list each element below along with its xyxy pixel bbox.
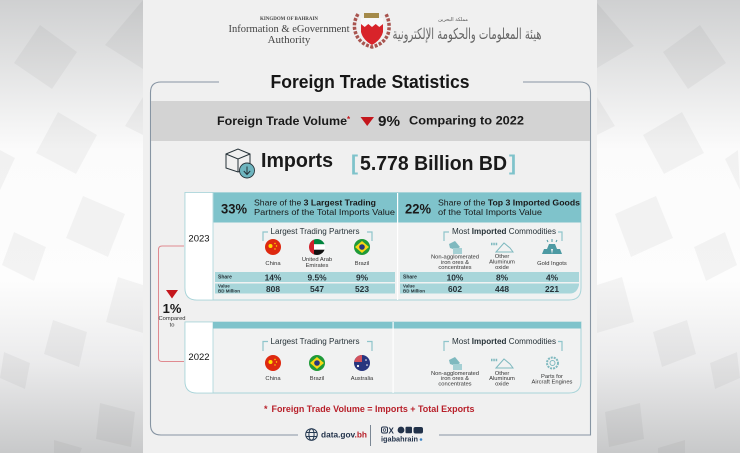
panel: largest trading partners 2022: Australia [351,376,374,382]
panel: most imported commodities 2023: Aluminum [489,260,515,266]
authority name in Arabic: هيئة المعلومات والحكومة الإلكترونية [392,25,542,43]
header: trading partners share: 33% [221,202,247,216]
year cell: 2022 [188,352,210,363]
panel: most imported commodities 2023: Non-agglomerated [431,254,479,260]
panel: most imported commodities 2023: concentrates [438,265,472,271]
summary band: Comparing to 2022 [409,116,524,128]
panel: most imported commodities 2023: iron ores & [441,260,469,266]
summary band: * [347,115,351,124]
imports heading: [ [351,152,358,175]
header logo block [228,13,542,47]
panel: largest trading partners 2023: Emirates [306,263,329,269]
data rows: 14% [265,272,282,282]
footer [306,425,423,446]
data rows: 8% [496,272,509,282]
authority name in English: Information & eGovernment [228,23,350,35]
data rows: 4% [546,272,559,282]
header: imported goods share: Share of the Top 3 Imported Goods [438,198,580,208]
table: 2023 [185,192,581,300]
panel: most imported commodities 2022: concentrates [438,382,472,388]
header: imported goods share: 22% [405,202,431,216]
icon: globe [306,429,317,440]
panel: most imported commodities 2022: oxide [495,382,509,388]
red comparison connector: Compared [158,316,186,322]
red comparison connector: to [170,322,174,328]
header: imported goods share: of the Total Imports Value [438,207,542,217]
summary band: Foreign Trade Volume [217,116,347,128]
red comparison connector [158,246,186,362]
flag: China [265,355,281,371]
icon row: social media: X [388,426,394,436]
panel: largest trading partners 2022: China [265,376,281,382]
panel: most imported commodities 2022: Aircraft Engines [532,380,573,386]
year cell [185,192,213,300]
panel: largest trading partners 2023 [215,227,395,294]
header: trading partners share [214,193,397,222]
data rows: BD Million [218,288,240,294]
panel: most imported commodities 2022: iron ores & [441,376,469,382]
header strip [213,322,581,328]
panel: largest trading partners 2022: Largest Trading Partners [270,337,360,346]
icon: gold ingots [542,239,562,254]
panel: largest trading partners 2023: China [265,261,281,267]
flag: Brazil [309,355,325,371]
authority name in Arabic [392,17,542,43]
data rows: 10% [447,272,464,282]
panel: largest trading partners 2023: Largest Trading Partners [270,227,360,236]
icon: Bahrain emblem [354,13,389,47]
icon: down triangle [166,290,178,298]
data rows: 547 [310,284,324,294]
header: imported goods share [398,193,581,222]
data rows: Value [218,284,230,288]
summary band [151,101,590,141]
imports heading [226,149,516,178]
data rows [215,272,395,294]
authority name in Arabic: مملكة البحرين [438,17,468,23]
panel: most imported commodities 2023: Most Imported Commodities [452,227,556,236]
icon: down triangle [360,117,374,126]
imports heading: 5.778 Billion BD [360,153,507,175]
icon: iron ore [449,357,462,370]
imports heading: ] [509,152,516,175]
header: trading partners share: Partners of the Total Imports Value [254,207,395,217]
red comparison connector: 1% [163,301,182,316]
panel: largest trading partners 2023: United Arab [302,257,332,263]
icon: gear [547,358,558,368]
flag: Australia [354,355,370,371]
flag: Brazil [354,239,370,255]
data rows: BD Million [403,288,425,294]
data rows: Share [403,274,417,280]
summary band: 9% [378,113,400,130]
footer: data.gov.bh [321,430,367,440]
panel: most imported commodities 2022: Other [495,371,509,377]
data rows: 9.5% [307,272,327,282]
authority name in English: KINGDOM OF BAHRAIN [260,17,318,22]
data rows: 602 [448,284,462,294]
data rows [400,272,579,294]
icon: iron ore [449,241,462,254]
authority name in English [228,17,350,46]
central panel [143,0,597,453]
imports heading: Imports [261,150,333,172]
footer: igabahrain [381,436,418,444]
flag: China [265,239,281,255]
panel: most imported commodities 2022: Aluminum [489,376,515,382]
table: 2022 [185,322,581,393]
panel: most imported commodities 2023: Gold Ingots [537,261,567,267]
footnote: * [264,404,268,414]
data rows: 9% [356,272,369,282]
icon: aluminum oxide [491,243,513,252]
panel: most imported commodities 2023: oxide [495,265,509,271]
icon: aluminum oxide [491,359,513,368]
year cell: 2023 [188,234,210,244]
flag: UAE [309,239,325,255]
icon: box with down arrow [226,149,254,178]
year cell [185,322,213,393]
panel: most imported commodities 2022: Most Imported Commodities [452,337,556,346]
panel: most imported commodities 2022: Non-agglomerated [431,371,479,377]
data rows: 221 [545,284,559,294]
data rows: Share [218,274,232,280]
title: Foreign Trade Statistics [270,72,470,92]
panel: most imported commodities 2022 [431,337,573,388]
panel: most imported commodities 2022: Parts for [541,374,563,380]
panel: largest trading partners 2022 [263,337,374,382]
panel: most imported commodities 2023: Other [495,254,509,260]
authority name in English: Authority [268,34,311,46]
panel: most imported commodities 2023 [400,227,579,294]
data rows: 523 [355,284,369,294]
panel: largest trading partners 2022: Brazil [310,376,324,382]
data rows: 808 [266,284,280,294]
header: trading partners share: Share of the 3 Largest Trading [254,198,376,208]
main frame outline [150,82,590,435]
data rows: 448 [495,284,509,294]
panel: largest trading partners 2023: Brazil [355,261,369,267]
data rows: Value [403,284,415,288]
footnote: Foreign Trade Volume = Imports + Total Exports [272,404,474,414]
